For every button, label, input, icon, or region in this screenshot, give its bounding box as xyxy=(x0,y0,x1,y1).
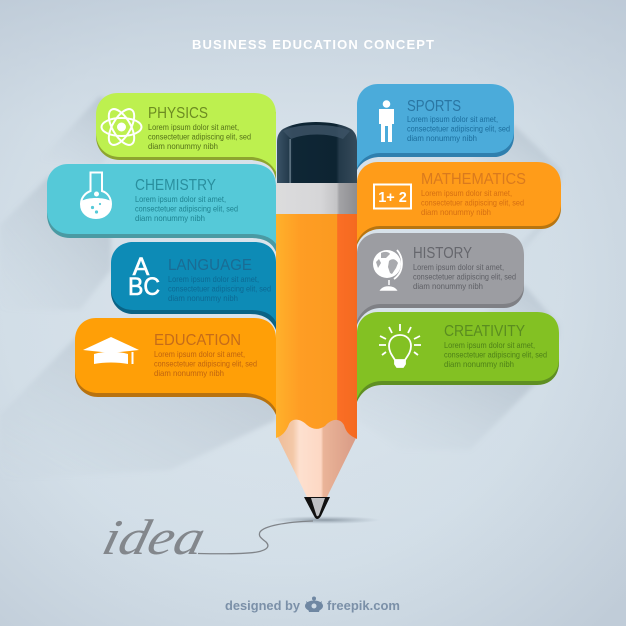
footer credit: designed by xyxy=(225,598,301,613)
text: physics body: Lorem ipsum dolor sit amet, xyxy=(148,123,239,132)
text: history body: Lorem ipsum dolor sit amet, xyxy=(413,263,504,272)
text: mathematics body: diam nonummy nibh xyxy=(421,208,491,217)
title: BUSINESS EDUCATION CONCEPT xyxy=(192,37,434,52)
text: chemistry body: diam nonummy nibh xyxy=(135,214,205,223)
heading: sports: SPORTS xyxy=(407,98,461,115)
text: mathematics body: consectetuer adipiscing elit, sed xyxy=(421,198,524,208)
panel: physics xyxy=(96,93,276,180)
panel: mathematics xyxy=(357,162,561,245)
heading: mathematics: MATHEMATICS xyxy=(421,171,526,188)
text: history body: diam nonummy nibh xyxy=(413,282,483,291)
heading: chemistry: CHEMISTRY xyxy=(135,177,216,194)
text: creativity body: diam nonummy nibh xyxy=(444,360,514,369)
text: creativity body xyxy=(444,341,547,369)
text: creativity body: consectetuer adipiscing elit, sed xyxy=(444,350,547,360)
text: chemistry body: Lorem ipsum dolor sit amet, xyxy=(135,195,226,204)
text: physics body xyxy=(148,123,251,151)
text: language body xyxy=(168,275,271,303)
text: education body: consectetuer adipiscing elit, sed xyxy=(154,360,257,368)
pencil metal band xyxy=(276,183,357,214)
text: creativity body: Lorem ipsum dolor sit amet, xyxy=(444,341,535,350)
idea handwriting: idea xyxy=(97,510,211,565)
panel: creativity xyxy=(357,312,559,402)
text: mathematics body: Lorem ipsum dolor sit amet, xyxy=(421,189,512,198)
panel: education xyxy=(75,318,276,415)
pencil eraser cap xyxy=(277,122,357,183)
pencil wood cone xyxy=(277,415,357,497)
heading: physics: PHYSICS xyxy=(148,105,208,122)
pencil graphite tip xyxy=(304,497,330,519)
text: education body xyxy=(154,350,257,378)
icon: 1+2 board: 1+ 2 xyxy=(378,190,407,206)
icon: person xyxy=(379,100,394,142)
text: physics body: diam nonummy nibh xyxy=(148,142,218,151)
icon: light bulb xyxy=(379,324,421,367)
icon: globe xyxy=(373,250,402,290)
heading: education: EDUCATION xyxy=(154,332,241,349)
text: sports body: diam nonummy nibh xyxy=(407,134,477,143)
panel: chemistry xyxy=(47,164,276,252)
text: language body: Lorem ipsum dolor sit amet, xyxy=(168,275,259,284)
text: chemistry body: consectetuer adipiscing elit, sed xyxy=(135,204,238,214)
text: chemistry body xyxy=(135,195,238,223)
footer credit: freepik.com xyxy=(327,598,400,613)
text: sports body: consectetuer adipiscing elit, sed xyxy=(407,124,510,134)
heading: language: LANGUAGE xyxy=(168,257,252,274)
icon: flask xyxy=(81,172,111,218)
text: education body: diam nonummy nibh xyxy=(154,369,224,378)
text: physics body: consectetuer adipiscing elit, sed xyxy=(148,132,251,142)
panel: sports xyxy=(357,84,514,170)
panel: language xyxy=(111,242,276,330)
pencil xyxy=(270,122,380,524)
icon: abc letters: A xyxy=(133,253,150,281)
text: language body: diam nonummy nibh xyxy=(168,294,238,303)
footer credit xyxy=(225,596,400,613)
icon: crown xyxy=(305,596,323,612)
pencil body xyxy=(276,214,357,439)
text: history body xyxy=(413,263,516,291)
panel: language: BC xyxy=(128,273,160,301)
heading: creativity: CREATIVITY xyxy=(444,323,525,340)
icon: graduation cap xyxy=(83,337,139,364)
heading: history: HISTORY xyxy=(413,245,472,262)
long shadows xyxy=(0,96,561,480)
text: history body: consectetuer adipiscing elit, sed xyxy=(413,272,516,282)
idea handwriting xyxy=(97,510,313,565)
text: language body: consectetuer adipiscing elit, sed xyxy=(168,284,271,294)
text: sports body xyxy=(407,115,510,143)
pencil graphite shadow xyxy=(270,516,380,524)
text: mathematics body xyxy=(421,189,524,217)
text: education body: Lorem ipsum dolor sit amet, xyxy=(154,350,245,359)
icon: 1+2 board xyxy=(374,184,411,208)
text: sports body: Lorem ipsum dolor sit amet, xyxy=(407,115,498,124)
icon: atom xyxy=(102,105,142,149)
panel: history xyxy=(357,233,524,325)
